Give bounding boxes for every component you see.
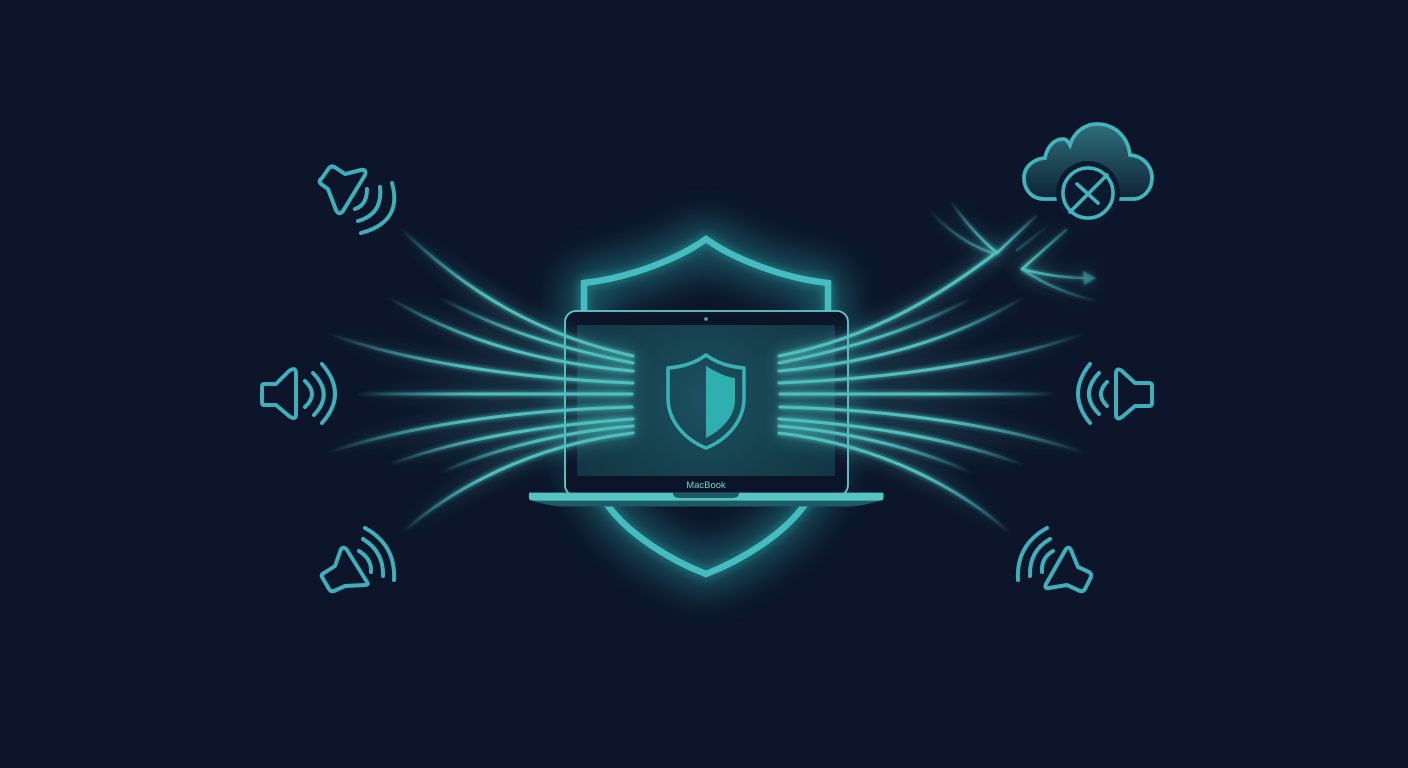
arrow head	[1083, 271, 1096, 285]
laptop base top	[529, 493, 884, 501]
sound waves entering from the right	[779, 252, 1085, 533]
brand label: MacBook	[686, 480, 726, 491]
icon: speaker middle right	[1078, 364, 1152, 423]
inner shield icon	[668, 355, 744, 448]
laptop lid	[565, 311, 848, 496]
trackpad notch	[673, 493, 739, 498]
icon: cloud with blocked mark	[1024, 124, 1152, 225]
icon: speaker bottom right	[1018, 528, 1091, 591]
sound waves entering from the left	[327, 228, 633, 533]
camera	[704, 317, 708, 321]
cloud cut-out	[1056, 161, 1120, 225]
large shield behind laptop	[584, 239, 828, 574]
icon: speaker bottom left	[322, 528, 394, 591]
icon: speaker top left	[320, 166, 394, 233]
laptop	[529, 311, 884, 506]
icon: speaker middle left	[262, 364, 335, 423]
blocked circle	[1063, 168, 1113, 218]
laptop base underside	[531, 499, 881, 506]
deflected waves near cloud	[928, 200, 1100, 302]
laptop screen	[577, 325, 835, 476]
